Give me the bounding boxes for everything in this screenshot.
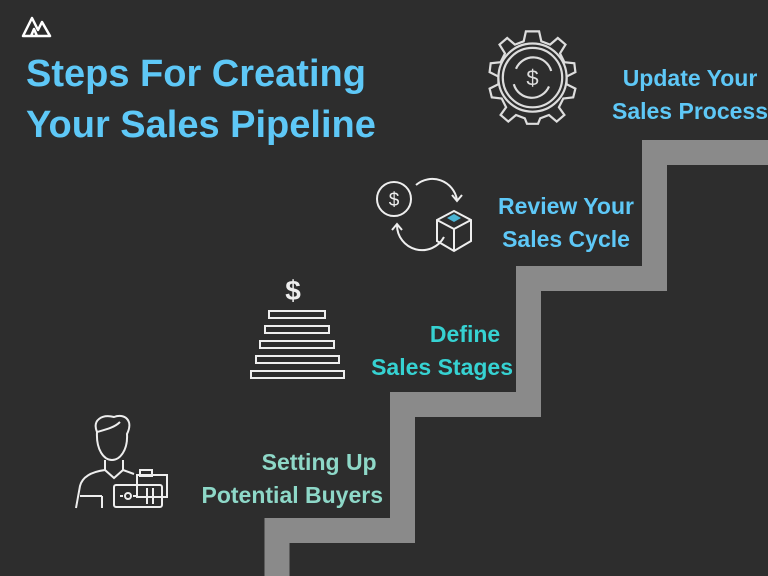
title: Your Sales Pipeline	[26, 104, 376, 146]
label: define	[371, 321, 513, 380]
label: update: Update Your	[623, 65, 757, 91]
label: review: Sales Cycle	[502, 226, 630, 252]
label: update	[612, 65, 768, 124]
label: setting up: Potential Buyers	[202, 482, 383, 508]
label: update: Sales Process	[612, 98, 768, 124]
icon: logo	[22, 16, 52, 38]
title	[26, 53, 376, 146]
icon: stages pyramid	[250, 275, 345, 379]
icon: gear with dollar	[488, 30, 577, 125]
icon: sales cycle	[376, 178, 472, 252]
label: define: Sales Stages	[371, 354, 513, 380]
label: setting up	[202, 449, 383, 508]
icon: gear with dollar: $	[526, 65, 539, 90]
icon: person with register	[75, 414, 168, 508]
icon: sales cycle: $	[389, 190, 400, 211]
title: Steps For Creating	[26, 53, 366, 95]
label: setting up: Setting Up	[262, 449, 377, 475]
label: review	[498, 193, 634, 252]
label: review: Review Your	[498, 193, 634, 219]
icon: stages pyramid: $	[285, 275, 301, 306]
label: define: Define	[430, 321, 500, 347]
